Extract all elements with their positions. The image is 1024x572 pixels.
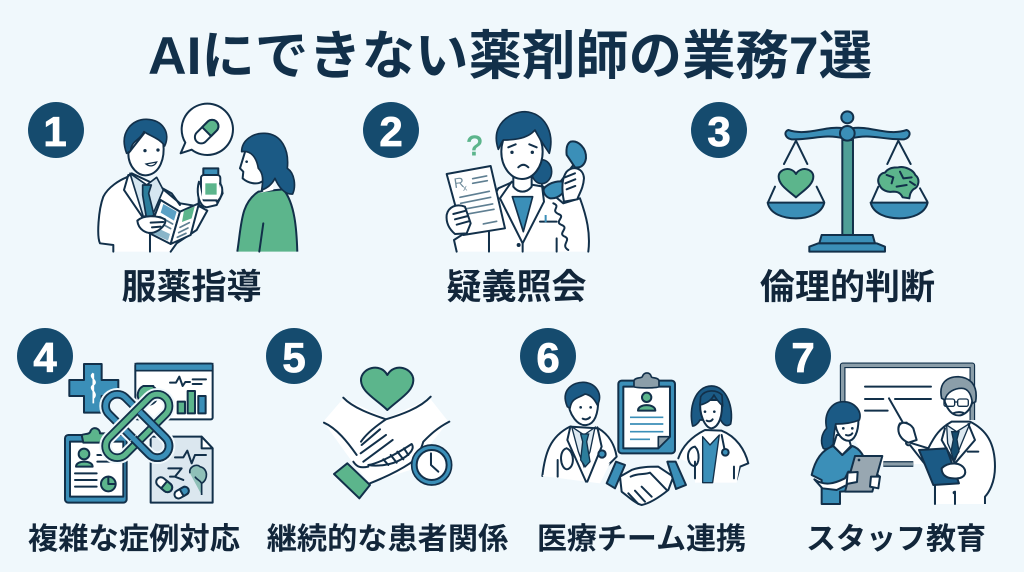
label: 継続的な患者関係: 継続的な患者関係	[267, 522, 508, 556]
label: 医療チーム連携: 医療チーム連携	[537, 523, 746, 556]
panel: 1 medication guidance	[28, 102, 297, 307]
icon: linked records and charts	[65, 364, 213, 503]
number badge 7	[775, 328, 831, 384]
panel: 5 ongoing patient relationship	[266, 328, 508, 556]
number badge 3	[691, 102, 747, 158]
label: 倫理的判断: 倫理的判断	[760, 268, 935, 307]
icon: doctors, clipboard and handshake	[542, 373, 748, 505]
number badge 3: 3	[707, 108, 731, 155]
label: 疑義照会: 疑義照会	[446, 268, 587, 307]
panel: 6 medical team collaboration	[520, 328, 748, 556]
icon: pharmacist on phone holding prescription: ?	[467, 130, 482, 161]
icon: balance scale with heart and brain	[768, 111, 928, 252]
number badge 6	[520, 328, 576, 384]
label: 服薬指導: 服薬指導	[121, 268, 262, 307]
number badge 7: 7	[791, 334, 815, 381]
icon: teacher at whiteboard with staff member	[812, 364, 995, 504]
icon: pharmacist on phone holding prescription: x	[462, 182, 468, 193]
number badge 2: 2	[379, 108, 403, 155]
number badge 2	[363, 102, 419, 158]
icon: pharmacist explaining medicine to patient	[98, 104, 297, 252]
number badge 5	[266, 328, 322, 384]
number badge 6: 6	[536, 334, 560, 381]
panel: 7 staff education	[775, 328, 995, 556]
icon: pharmacist on phone holding prescription: R	[453, 174, 465, 191]
title: AIにできない薬剤師の業務7選	[148, 27, 872, 86]
label: スタッフ教育: スタッフ教育	[806, 523, 986, 556]
icon: pharmacist on phone holding prescription	[447, 112, 589, 252]
number badge 1: 1	[43, 108, 67, 155]
panel: 4 complex case handling	[17, 328, 240, 556]
number badge 4: 4	[33, 334, 57, 381]
panel: 3 ethical judgement	[691, 102, 935, 307]
number badge 4	[17, 328, 73, 384]
number badge 1	[28, 102, 84, 158]
label: 複雑な症例対応: 複雑な症例対応	[28, 522, 240, 556]
panel: 2 prescription inquiry	[363, 102, 589, 307]
number badge 5: 5	[282, 334, 306, 381]
icon: clasped hands with heart and clock	[323, 368, 452, 498]
